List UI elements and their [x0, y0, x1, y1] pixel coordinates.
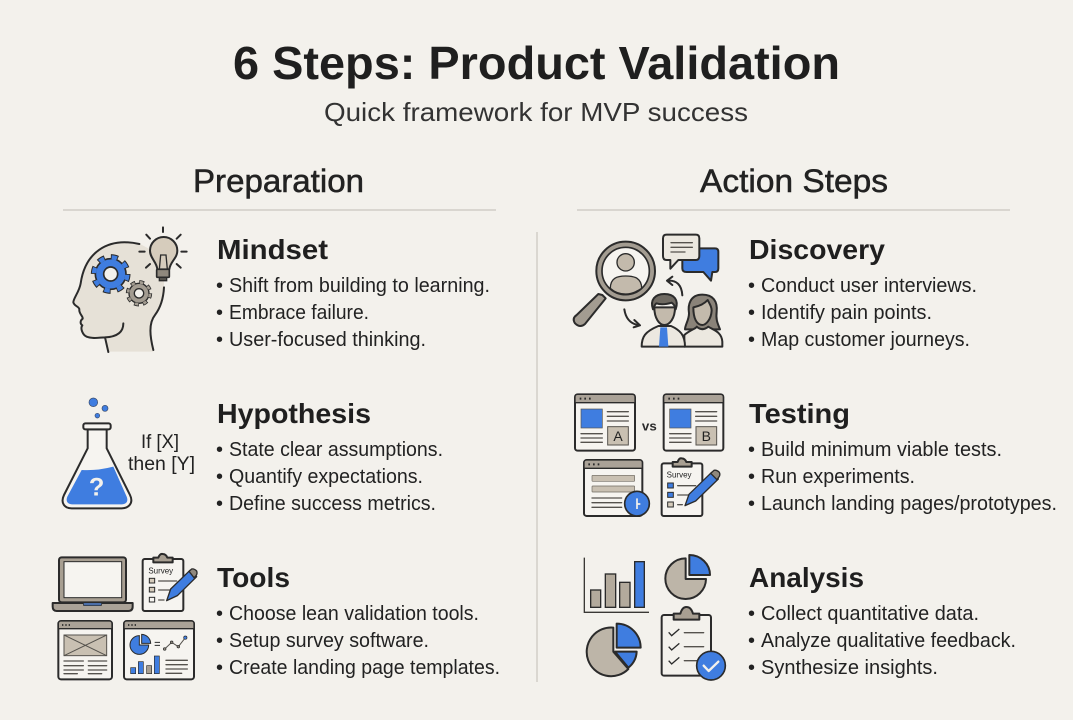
bullet list: Define success metrics. [229, 493, 436, 515]
pie chart: top [665, 555, 710, 599]
bullet list [748, 603, 1016, 679]
bullet list: • [748, 603, 755, 625]
heading: Preparation: Preparation [193, 163, 364, 199]
icon: woman [684, 295, 722, 347]
bullet list: • [748, 439, 755, 461]
bullet list: • [748, 657, 755, 679]
bullet list: • [748, 493, 755, 515]
bullet list: Run experiments. [761, 466, 915, 488]
bullet list: • [216, 466, 223, 488]
subtitle: Quick framework for MVP success [324, 97, 748, 127]
label: If X then Y: then [Y] [128, 454, 195, 475]
bullet list: Conduct user interviews. [761, 275, 977, 297]
bullet list: Choose lean validation tools. [229, 603, 479, 625]
bullet list: • [748, 466, 755, 488]
heading: Analysis: Analysis [749, 562, 864, 593]
panel: Hypothesis [63, 398, 443, 515]
bullet list [748, 275, 977, 351]
bullet list: Setup survey software. [229, 630, 429, 652]
heading: Action Steps: Action Steps [700, 163, 888, 199]
heading: Testing: Testing [749, 398, 850, 429]
icon: browser B: B [702, 428, 711, 444]
icon: magnifier, users and speech bubbles [574, 235, 722, 347]
icon: blue gear [94, 257, 127, 291]
bullet list: • [216, 275, 223, 297]
bullet list: Analyze qualitative feedback. [761, 630, 1016, 652]
icon: browser B [664, 394, 723, 451]
bullet list: • [748, 630, 755, 652]
icon: grey gear [128, 282, 150, 304]
bullet list: • [216, 302, 223, 324]
bullet list [216, 603, 500, 679]
icon: A/B tests and survey [575, 394, 723, 516]
bullet list: Map customer journeys. [761, 329, 970, 351]
panel: Tools [53, 554, 500, 679]
panel: Analysis [584, 555, 1016, 680]
panel: Mindset [73, 227, 490, 352]
heading: Tools: Tools [217, 562, 290, 593]
icon: wireframe browser [58, 621, 112, 679]
icon: landing page browser [584, 460, 649, 516]
bullet list: Create landing page templates. [229, 657, 500, 679]
icon: dashboard browser [124, 621, 194, 679]
icon: survey clipboard [143, 554, 197, 611]
bullet list [216, 275, 490, 351]
pie chart: bottom [587, 624, 641, 676]
bullet list: Build minimum viable tests. [761, 439, 1002, 461]
icon: man [642, 294, 685, 347]
bullet list: • [216, 329, 223, 351]
icon: laptop [53, 557, 133, 611]
heading: Mindset: Mindset [217, 234, 328, 265]
bullet list: • [216, 657, 223, 679]
icon: light bulb [139, 227, 187, 281]
icon: arrows [624, 277, 682, 327]
title: 6 Steps: Product Validation [233, 37, 840, 89]
bullet list: • [748, 275, 755, 297]
bullet list: User-focused thinking. [229, 329, 426, 351]
icon: speech bubbles [663, 235, 718, 281]
bullet list: Collect quantitative data. [761, 603, 979, 625]
icon: flask [63, 398, 131, 508]
bullet list [748, 439, 1057, 515]
panel: Testing [575, 394, 1057, 516]
bullet list: Synthesize insights. [761, 657, 938, 679]
label: If X then Y [128, 432, 195, 475]
bullet list: Embrace failure. [229, 302, 369, 324]
icon: checklist clipboard [662, 607, 725, 680]
bullet list: • [748, 302, 755, 324]
bullet list: State clear assumptions. [229, 439, 443, 461]
icon: browser A [575, 394, 635, 451]
bullet list: Quantify expectations. [229, 466, 423, 488]
icon: browser A: A [613, 428, 623, 444]
heading: Discovery: Discovery [749, 234, 885, 265]
icon: flask: ? [89, 474, 104, 502]
bullet list [216, 439, 443, 515]
icon: survey clipboard: Survey [667, 471, 692, 480]
bullet list: • [216, 439, 223, 461]
panel: Discovery [574, 234, 977, 351]
bullet list: Identify pain points. [761, 302, 932, 324]
icon: tools set [53, 554, 197, 679]
label: vs: vs [642, 418, 657, 433]
bullet list: • [748, 329, 755, 351]
icon: magnifier [574, 242, 655, 326]
bullet list: • [216, 603, 223, 625]
bullet list: Shift from building to learning. [229, 275, 490, 297]
bullet list: • [216, 493, 223, 515]
label: If X then Y: If [X] [141, 432, 179, 453]
icon: charts and checklist [584, 555, 725, 680]
bullet list: • [216, 630, 223, 652]
bullet list: Launch landing pages/prototypes. [761, 493, 1057, 515]
icon: head with gears and light bulb [73, 227, 187, 352]
icon: survey clipboard [662, 458, 720, 516]
heading: Hypothesis: Hypothesis [217, 398, 371, 429]
bar chart [584, 558, 649, 612]
icon: survey clipboard: Survey [148, 566, 173, 575]
